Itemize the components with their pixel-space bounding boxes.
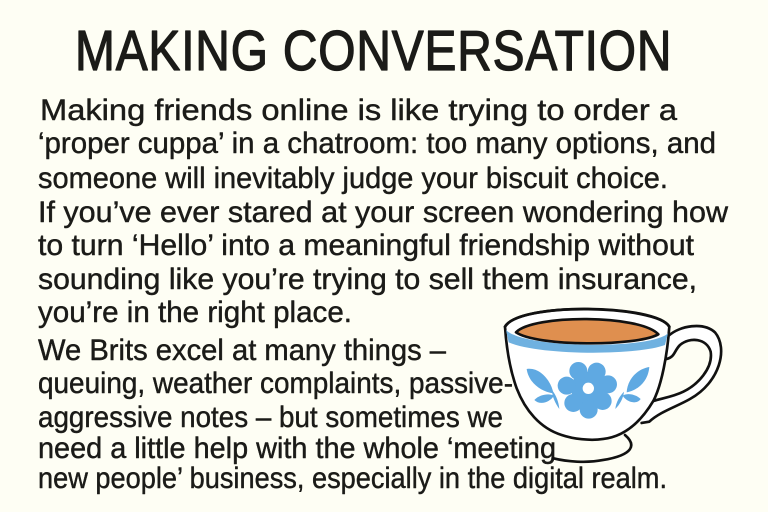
text block: intro paragraph: [38, 94, 728, 329]
text block: second paragraph: new people’ business, especially in the digital realm.: [38, 462, 667, 495]
left leaves: [527, 369, 559, 409]
cup handle: [630, 326, 721, 423]
text block: intro paragraph: If you’ve ever stared at your screen wondering how: [38, 196, 728, 229]
icon: teacup: [505, 309, 721, 462]
text block: second paragraph: [38, 334, 667, 495]
text block: intro paragraph: sounding like you’re trying to sell them insurance,: [38, 263, 697, 296]
text block: intro paragraph: Making friends online is like trying to order a: [40, 94, 677, 127]
tea: [516, 319, 658, 343]
text block: intro paragraph: ‘proper cuppa’ in a chatroom: too many options, and: [38, 127, 716, 160]
text block: intro paragraph: you’re in the right place.: [38, 296, 352, 329]
title: MAKING CONVERSATION: [75, 19, 671, 83]
text block: second paragraph: aggressive notes – but sometimes we: [38, 401, 503, 434]
flower centre: [583, 383, 594, 394]
blue rim band: [506, 330, 668, 353]
text block: intro paragraph: someone will inevitably judge your biscuit choice.: [38, 162, 668, 195]
text block: second paragraph: We Brits excel at many things –: [38, 334, 446, 367]
text block: intro paragraph: to turn ‘Hello’ into a meaningful friendship without: [38, 229, 695, 262]
right leaves: [615, 367, 649, 409]
rim outline: [505, 309, 669, 327]
cup body: [505, 309, 669, 440]
flower: [558, 362, 617, 419]
text block: second paragraph: need a little help with the whole ‘meeting: [38, 432, 556, 465]
text block: second paragraph: queuing, weather complaints, passive-: [38, 367, 513, 400]
cup foot: [553, 435, 631, 462]
